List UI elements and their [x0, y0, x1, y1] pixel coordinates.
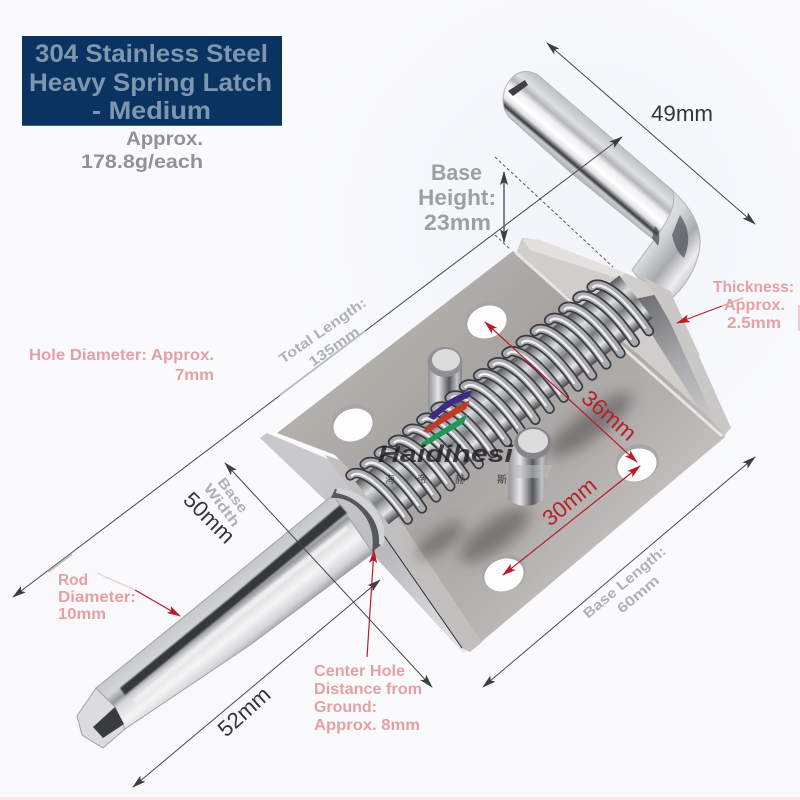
upper flange rim over spring: [642, 276, 700, 356]
flange edge strip: [325, 455, 482, 652]
rod tip: [77, 688, 125, 748]
thickness label: Thickness:: [713, 279, 794, 296]
latch product photo illustration: [77, 72, 731, 748]
hole diameter label: [29, 347, 214, 384]
weight label: 178.8g/each: [81, 152, 203, 173]
base width label: Base: [215, 474, 252, 516]
base height label: Height:: [418, 185, 496, 210]
52mm label: 52mm: [213, 682, 275, 742]
center hole distance label: Ground:: [314, 699, 377, 716]
guide pin upper: [428, 347, 462, 418]
title banner: - Medium: [92, 97, 211, 125]
base height label: [418, 160, 496, 235]
center hole distance label: Approx. 8mm: [314, 717, 420, 734]
red arrow: rod diameter: [97, 573, 180, 616]
thickness label: Approx.: [724, 297, 785, 314]
center hole distance label: [314, 663, 422, 734]
base plate: [277, 251, 725, 643]
watermark logo: Haidihesi: [378, 441, 515, 468]
title banner: Heavy Spring Latch: [29, 69, 272, 97]
red arrow: center hole distance: [367, 550, 374, 657]
total length label: 135mm: [306, 323, 362, 369]
weight label: [81, 129, 203, 173]
49mm label: 49mm: [651, 101, 713, 126]
upper flange: [515, 238, 730, 442]
dimension line: hook 49mm: [547, 43, 755, 224]
red arrow: thickness: [677, 298, 743, 323]
center hole distance label: Center Hole: [314, 663, 405, 680]
dimension line: base width 50mm: [225, 463, 432, 687]
plate reflections: [411, 383, 640, 572]
mounting holes: [326, 295, 664, 598]
lower rod: [96, 495, 373, 729]
dimension line: rod 52mm: [133, 580, 380, 787]
rod collar: [331, 488, 384, 552]
dimension line: total length: [13, 137, 622, 597]
bend line: [515, 252, 722, 436]
watermark logo: 赫: [455, 474, 465, 486]
rod diameter label: Diameter:: [58, 589, 136, 606]
30mm label: 30mm: [537, 472, 601, 531]
hook rod: [503, 72, 700, 308]
watermark logo: 海: [385, 473, 395, 486]
hole diameter label: 7mm: [175, 367, 214, 384]
base height label: Base: [431, 160, 482, 185]
base width label: Width: [201, 480, 243, 530]
rod diameter label: Rod: [58, 572, 88, 589]
red arrow: hole spacing 30mm: [503, 466, 640, 575]
base length label: Base Length:: [580, 543, 669, 621]
base width label: [178, 474, 252, 548]
watermark logo: 斯: [497, 473, 507, 486]
center hole distance label: Distance from: [314, 681, 422, 698]
thickness label: 2.5mm: [727, 315, 781, 332]
36mm label: 36mm: [577, 385, 641, 446]
base length label: 60mm: [614, 572, 662, 616]
red arrow: hole spacing 36mm: [485, 322, 637, 462]
thickness label: [713, 279, 794, 332]
total length label: Total Length:: [276, 294, 369, 366]
weight label: Approx.: [126, 129, 203, 150]
title banner: 304 Stainless Steel: [35, 40, 268, 68]
edge marks: [0, 305, 800, 800]
rod diameter label: 10mm: [58, 606, 106, 623]
base height label: 23mm: [424, 210, 491, 235]
lower flange: [260, 433, 470, 653]
watermark logo: [378, 390, 515, 486]
rod diameter label: [58, 572, 136, 623]
guide pin lower: [508, 427, 552, 506]
dimension line: base height: [495, 157, 613, 267]
watermark logo: 帝: [417, 473, 427, 486]
title banner: [22, 36, 282, 126]
dimension line: base length 60mm: [483, 457, 755, 687]
base width label: 50mm: [178, 487, 240, 548]
spring and inner rod: [350, 269, 658, 531]
hole diameter label: Hole Diameter: Approx.: [29, 347, 214, 364]
